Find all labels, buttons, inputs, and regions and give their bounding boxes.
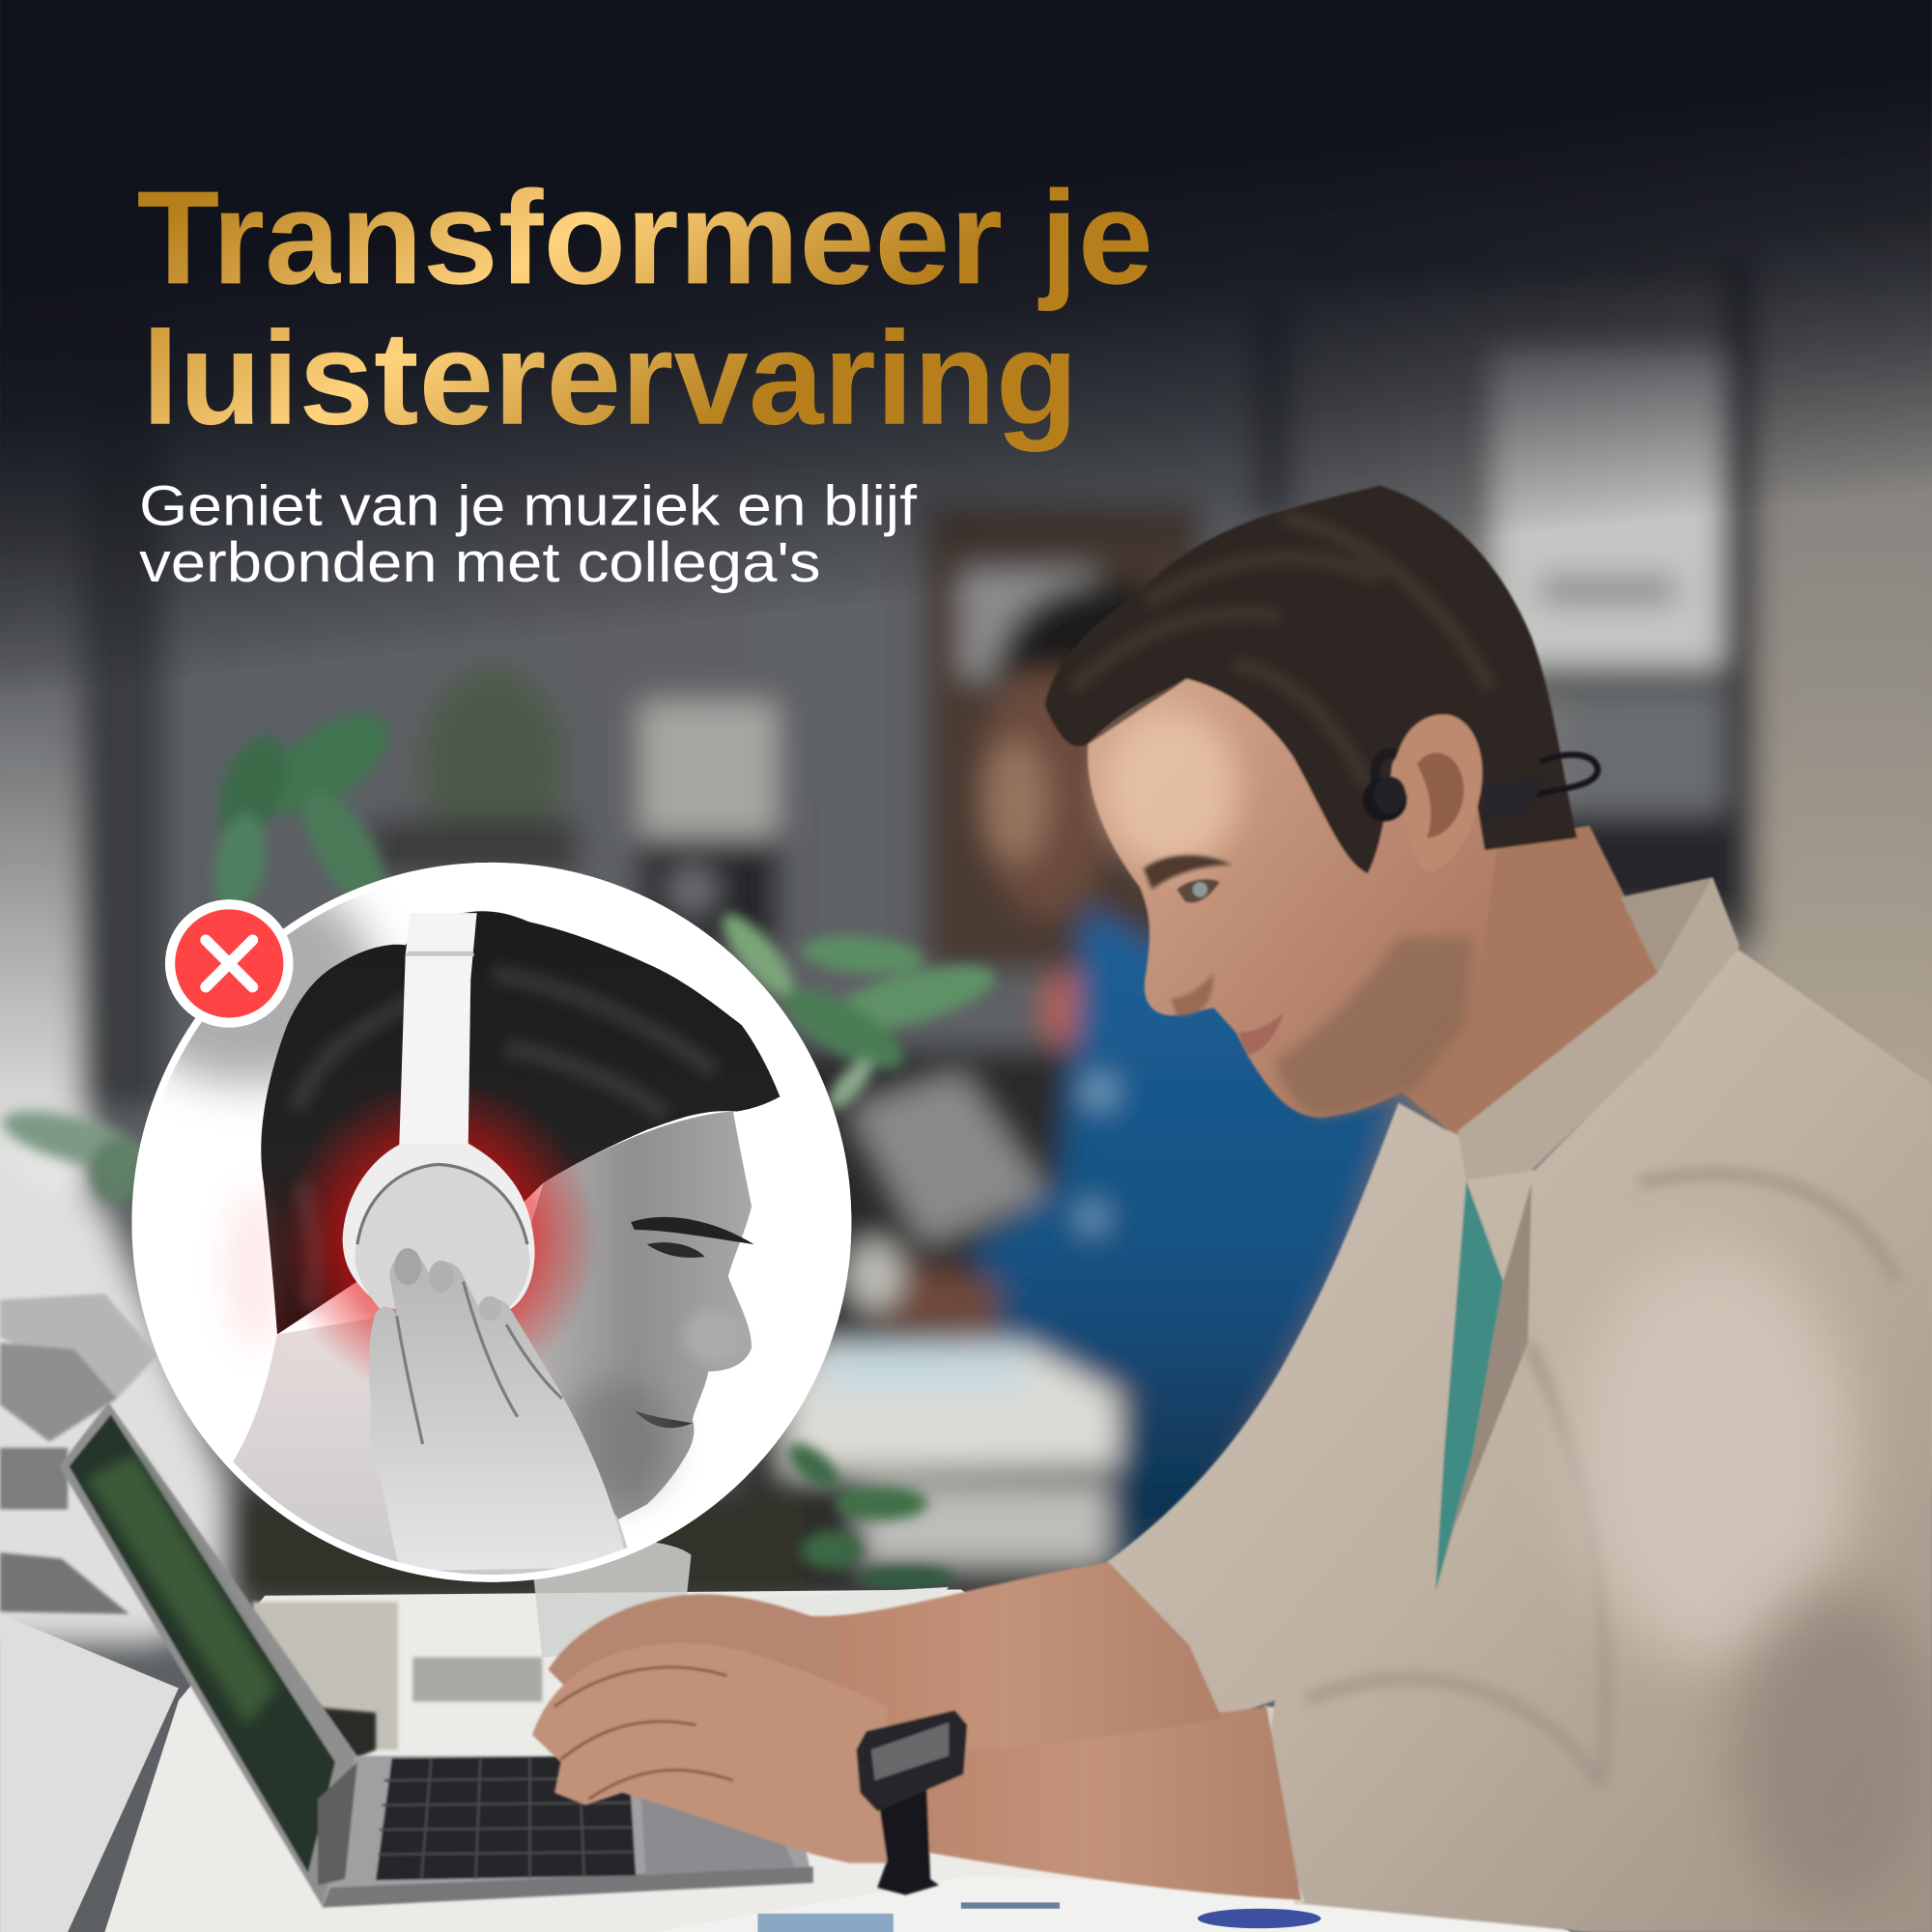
man with open-ear headphones bbox=[532, 486, 1932, 1932]
circle ring edge bbox=[135, 867, 848, 1578]
coffee machine bbox=[640, 702, 777, 838]
cuff edge bbox=[1265, 1707, 1300, 1904]
keyboard bbox=[376, 1756, 636, 1880]
wire trays bbox=[0, 1293, 157, 1707]
left white desk bbox=[0, 1133, 271, 1638]
lower forearm bbox=[863, 1707, 1301, 1900]
earphone pod bbox=[1363, 777, 1407, 822]
typing hand bbox=[532, 1643, 887, 1863]
title: luisterervaring bbox=[142, 304, 1078, 453]
subtitle: verbonden met collega's bbox=[139, 531, 820, 594]
left window wall bbox=[0, 308, 86, 1195]
warning inset circle: over-ear headphone discomfort bbox=[117, 863, 851, 1589]
paper sheet under hand bbox=[690, 1587, 949, 1638]
hair highlights bbox=[296, 974, 715, 1306]
red x badge bbox=[165, 899, 294, 1028]
white back desk bbox=[782, 1343, 1119, 1472]
main white desk bbox=[104, 1589, 1571, 1932]
subtitle: Geniet van je muziek en blijf bbox=[139, 474, 918, 537]
eye bbox=[647, 1242, 705, 1258]
printed paper at bottom bbox=[653, 1875, 1571, 1932]
upper forearm bbox=[788, 1562, 1222, 1749]
laptop base bbox=[323, 1756, 813, 1907]
hand with fingers bbox=[369, 1255, 623, 1571]
hair texture bbox=[1072, 518, 1491, 788]
beard stubble bbox=[1275, 936, 1472, 1118]
brown panel bbox=[924, 502, 1202, 971]
right wall bbox=[1749, 246, 1932, 1479]
shelf bbox=[1293, 259, 1756, 273]
ear cup bbox=[343, 1144, 535, 1309]
cheek shadow bbox=[560, 1380, 671, 1503]
title: Transformeer je bbox=[137, 163, 1153, 312]
teal t-shirt bbox=[1435, 1180, 1503, 1592]
button drop shadow bbox=[117, 875, 376, 1084]
mouth bbox=[635, 1410, 693, 1428]
shirt sleeve crease bbox=[1306, 1174, 1897, 1786]
hinge bbox=[318, 1762, 357, 1886]
headband bbox=[399, 913, 477, 1146]
plant leaves bbox=[0, 695, 1002, 1588]
face bbox=[1088, 616, 1497, 1118]
eyebrow bbox=[631, 1217, 754, 1244]
blue shirt bbox=[974, 906, 1405, 1540]
back person hand bbox=[863, 1257, 998, 1343]
white binders bbox=[1493, 352, 1722, 666]
finger separations bbox=[397, 1282, 562, 1444]
back desk dark bbox=[739, 1047, 1109, 1602]
shirt collar bbox=[1458, 877, 1740, 1180]
back hand bbox=[549, 1594, 838, 1700]
subtitle bbox=[139, 474, 918, 594]
mouth bbox=[1238, 1012, 1284, 1055]
shirt back collar bbox=[1620, 877, 1725, 974]
red pain glow bbox=[284, 1086, 593, 1378]
fingernails bbox=[394, 1248, 501, 1321]
dark pillar bbox=[1251, 296, 1293, 518]
nose shading bbox=[684, 1314, 732, 1360]
earphone loop band bbox=[1375, 753, 1598, 820]
laptop behind bbox=[850, 1072, 1047, 1244]
hair bbox=[1045, 486, 1577, 873]
title bbox=[137, 163, 1153, 453]
foreground desk bbox=[0, 1541, 1571, 1932]
dark column bbox=[80, 321, 166, 1109]
dark floor under circle bbox=[222, 1485, 813, 1608]
x mark bbox=[206, 940, 252, 987]
back person bbox=[980, 659, 1115, 918]
face bbox=[493, 1112, 752, 1520]
smart watch bbox=[856, 1710, 967, 1895]
left desk panel bbox=[0, 1614, 179, 1932]
trackpad bbox=[640, 1786, 795, 1875]
hair bbox=[261, 911, 780, 1334]
glass of water bbox=[532, 1541, 692, 1658]
circle background bbox=[131, 863, 851, 1582]
ear bbox=[1394, 715, 1482, 872]
shirt body bbox=[1106, 949, 1932, 1932]
neck bbox=[233, 1314, 628, 1575]
eyebrow bbox=[1144, 855, 1233, 890]
neck bbox=[1368, 826, 1676, 1146]
plants behind bbox=[419, 666, 567, 863]
eye bbox=[1177, 879, 1220, 903]
shirt front shadow bbox=[1435, 1182, 1531, 1592]
desk clutter box bbox=[252, 1602, 398, 1749]
laptop bbox=[59, 1403, 813, 1907]
nose shadow bbox=[1171, 974, 1213, 1015]
laptop lid bbox=[59, 1403, 357, 1907]
cheek highlight bbox=[1103, 708, 1238, 868]
